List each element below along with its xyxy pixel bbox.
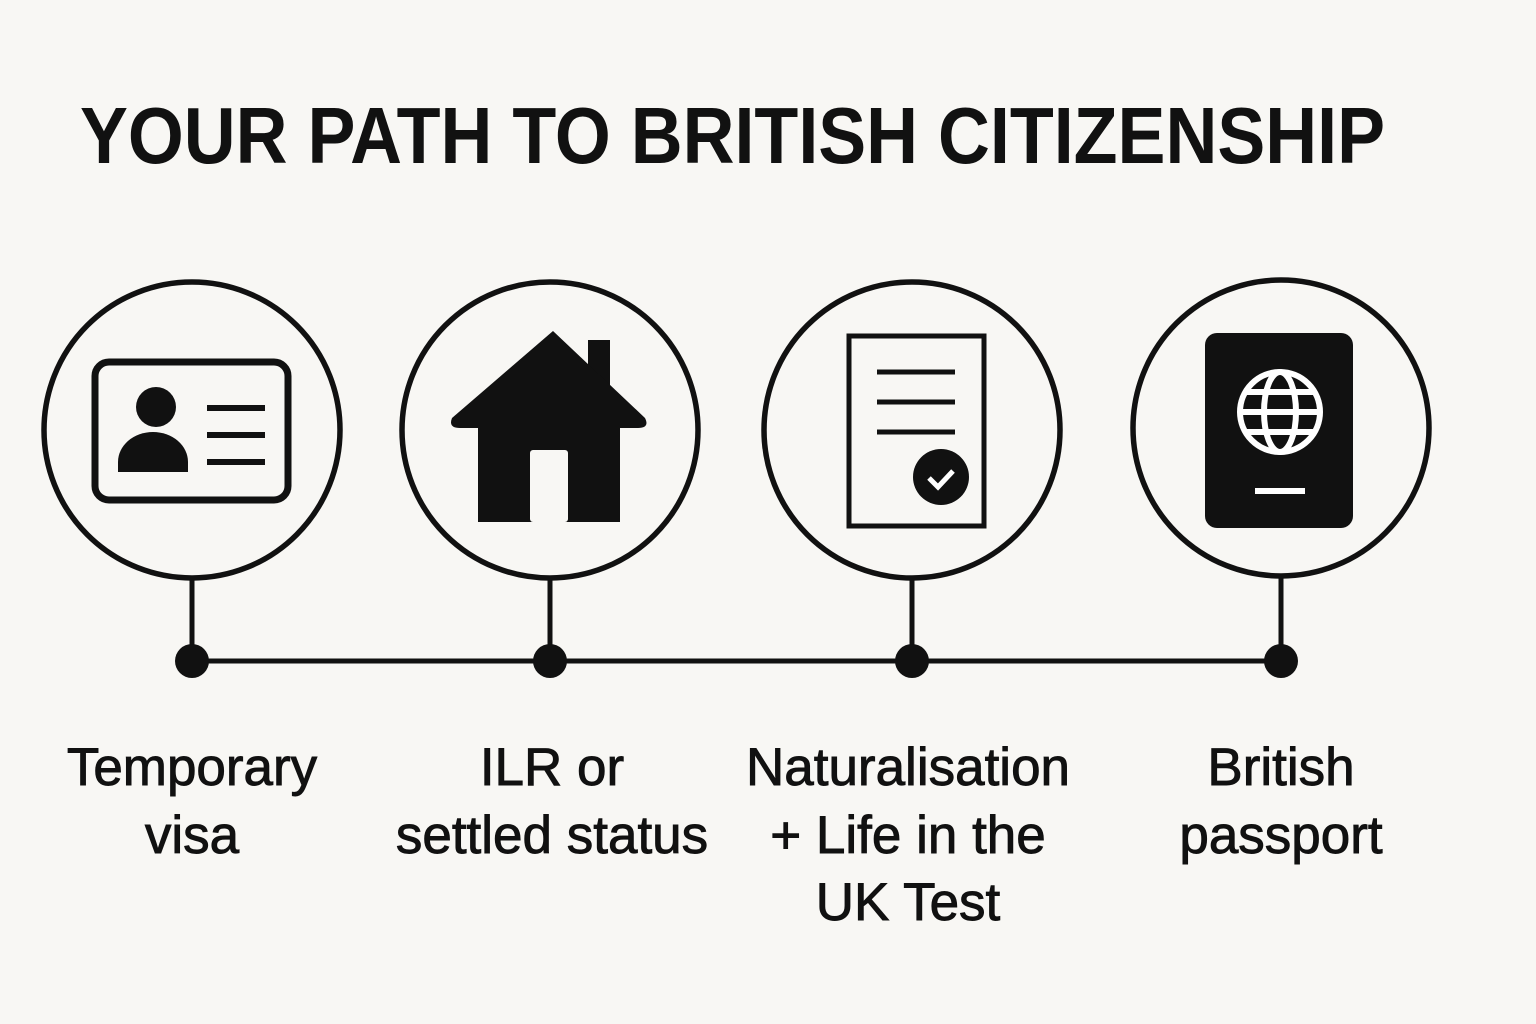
title: YOUR PATH TO BRITISH CITIZENSHIP xyxy=(80,91,1385,180)
step 3: naturalisation: Naturalisation xyxy=(746,738,1070,797)
step 3: naturalisation: UK Test xyxy=(816,873,1001,932)
step 4: passport: passport xyxy=(1179,806,1383,865)
icon: ID card xyxy=(95,362,288,500)
step 3: naturalisation: + Life in the xyxy=(770,806,1046,865)
step 1: temporary visa xyxy=(44,282,340,865)
step 2: ILR: settled status xyxy=(396,806,708,865)
icon: house xyxy=(451,331,646,522)
icon: document with check xyxy=(849,336,984,526)
step 4: passport: British xyxy=(1207,738,1355,797)
step 4: passport xyxy=(1133,280,1429,865)
step 3: naturalisation xyxy=(746,282,1070,932)
timeline line xyxy=(175,576,1298,678)
step 2: ILR xyxy=(396,282,708,865)
icon: passport xyxy=(1205,333,1353,528)
step 1: temporary visa: Temporary xyxy=(67,738,318,797)
step 2: ILR: ILR or xyxy=(480,738,624,797)
step 1: temporary visa: visa xyxy=(145,806,240,865)
